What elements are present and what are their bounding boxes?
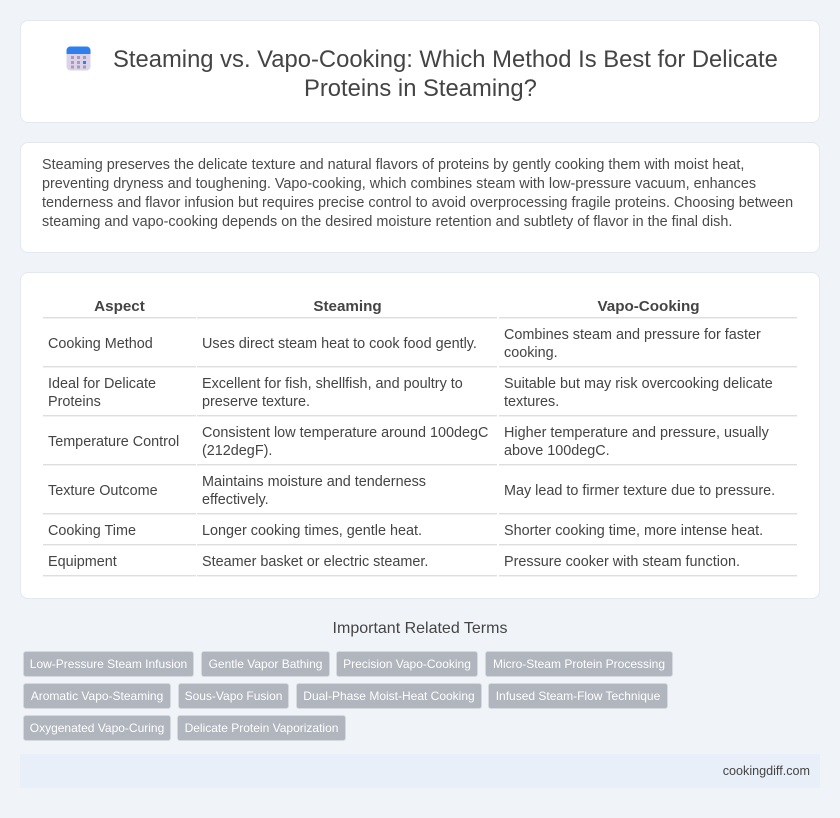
related term tags: Precision Vapo-Cooking bbox=[343, 657, 471, 671]
row: equipment: Steamer basket or electric steamer. bbox=[202, 554, 428, 570]
row: ideal for delicate proteins: preserve texture. bbox=[202, 394, 310, 410]
table header row: Vapo-Cooking bbox=[597, 298, 700, 315]
footer bbox=[20, 754, 820, 788]
table header row bbox=[94, 298, 700, 315]
row: cooking method bbox=[48, 327, 761, 361]
row: cooking method: Uses direct steam heat to cook food gently. bbox=[202, 336, 477, 352]
row: ideal for delicate proteins: Excellent for fish, shellfish, and poultry to bbox=[202, 376, 463, 392]
row: texture outcome: effectively. bbox=[202, 492, 269, 508]
related term tags: Oxygenated Vapo-Curing bbox=[30, 721, 164, 735]
panel: introduction text bbox=[20, 142, 820, 253]
panel: introduction text: steaming and vapo-cooking depends on the desired moisture retention and subtlety of flavor in the final dish. bbox=[42, 214, 732, 230]
title: Proteins in Steaming? bbox=[304, 75, 537, 102]
related term tags: Gentle Vapor Bathing bbox=[209, 657, 322, 671]
row: cooking time: Shorter cooking time, more intense heat. bbox=[504, 523, 763, 539]
row: temperature control: Consistent low temperature around 100degC bbox=[202, 425, 488, 441]
row: ideal for delicate proteins: Suitable but may risk overcooking delicate bbox=[504, 376, 773, 392]
panel: header bbox=[20, 20, 820, 123]
title: Steaming vs. Vapo-Cooking: Which Method Is Best for Delicate bbox=[113, 46, 778, 73]
row: temperature control: (212degF). bbox=[202, 443, 272, 459]
row: cooking method: Cooking Method bbox=[48, 336, 153, 352]
row: equipment: Pressure cooker with steam function. bbox=[504, 554, 740, 570]
row: temperature control: Higher temperature and pressure, usually bbox=[504, 425, 769, 441]
row: texture outcome: Texture Outcome bbox=[48, 483, 158, 499]
panel: introduction text: preventing dryness and toughening. Vapo-cooking, which combines steam with low-pressure vacuum, enhances bbox=[42, 176, 756, 192]
panel: introduction text: tenderness and flavor infusion but requires precise control to avoid overprocessing fragile proteins. Choosing between bbox=[42, 195, 793, 211]
row: texture outcome: May lead to firmer texture due to pressure. bbox=[504, 483, 775, 499]
footer: cookingdiff.com bbox=[723, 764, 810, 778]
row: ideal for delicate proteins: textures. bbox=[504, 394, 559, 410]
table header row: Steaming bbox=[313, 298, 382, 315]
row: equipment: Equipment bbox=[48, 554, 117, 570]
row: ideal for delicate proteins: Proteins bbox=[48, 394, 101, 410]
related term tags bbox=[23, 651, 673, 741]
table header row: Aspect bbox=[94, 298, 145, 315]
related term tags: Delicate Protein Vaporization bbox=[185, 721, 338, 735]
row: cooking time bbox=[48, 523, 763, 539]
related term tags: Micro-Steam Protein Processing bbox=[493, 657, 665, 671]
icon: calendar bbox=[66, 46, 90, 70]
row: temperature control: Temperature Control bbox=[48, 434, 179, 450]
panel: comparison table bbox=[20, 272, 820, 599]
row: temperature control: above 100degC. bbox=[504, 443, 610, 459]
related term tags: Low-Pressure Steam Infusion bbox=[30, 657, 187, 671]
row: cooking method: Combines steam and pressure for faster bbox=[504, 327, 761, 343]
related term tags: Sous-Vapo Fusion bbox=[185, 689, 282, 703]
row: texture outcome bbox=[48, 474, 775, 508]
row: cooking method: cooking. bbox=[504, 345, 558, 361]
title bbox=[113, 46, 778, 102]
row: cooking time: Cooking Time bbox=[48, 523, 136, 539]
row: temperature control bbox=[48, 425, 769, 459]
row: texture outcome: Maintains moisture and tenderness bbox=[202, 474, 426, 490]
row: equipment bbox=[48, 554, 740, 570]
row: ideal for delicate proteins: Ideal for Delicate bbox=[48, 376, 156, 392]
heading: important related terms: Important Related Terms bbox=[333, 620, 507, 637]
row: ideal for delicate proteins bbox=[48, 376, 773, 410]
row: cooking time: Longer cooking times, gentle heat. bbox=[202, 523, 422, 539]
related term tags: Aromatic Vapo-Steaming bbox=[31, 689, 163, 703]
panel: introduction text: Steaming preserves the delicate texture and natural flavors of proteins by gently cooking them with moist heat, bbox=[42, 157, 744, 173]
related term tags: Dual-Phase Moist-Heat Cooking bbox=[303, 689, 475, 703]
related term tags: Infused Steam-Flow Technique bbox=[496, 689, 660, 703]
